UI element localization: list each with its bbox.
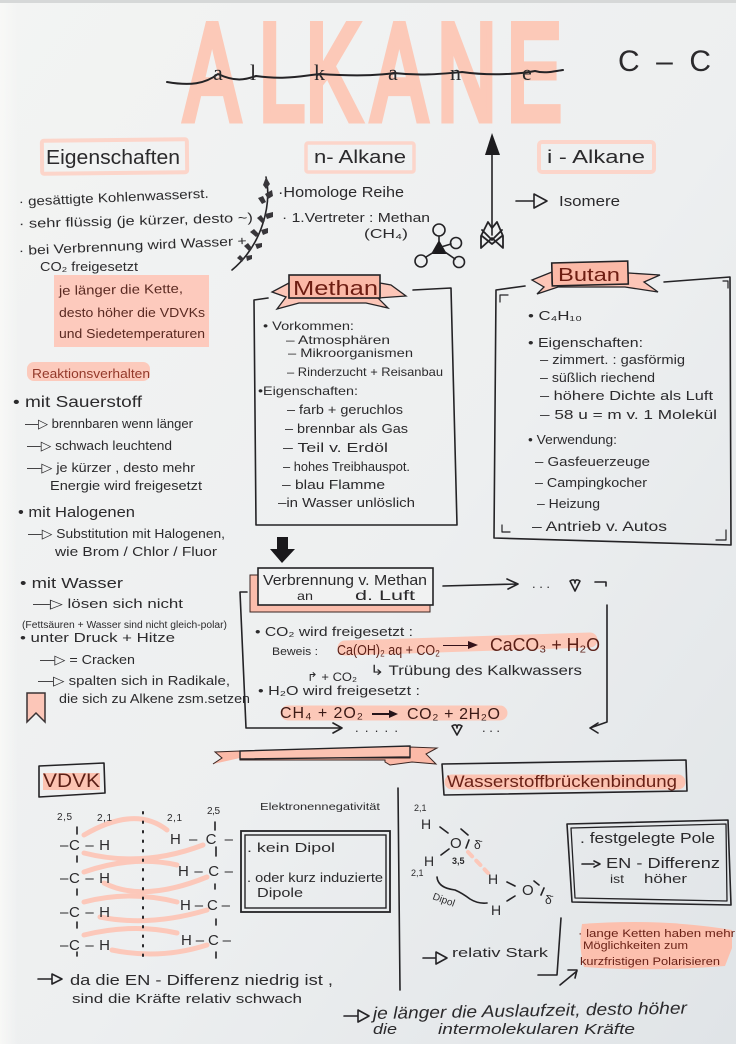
text block: Methan facts: • Vorkommen: (263, 319, 354, 333)
text block: Reaktionsverhalten list (13, 394, 250, 706)
diagram: hydrocarbon chains: –C – H (60, 904, 110, 921)
text block: Eigenschaften list (18, 186, 253, 274)
text block: n-Alkane notes: (CH₄) (364, 226, 408, 241)
text block: Eigenschaften list: · bei Verbrennung wird Wasser + (18, 233, 247, 258)
text: conclusion: die (373, 1021, 397, 1038)
callout: lange Ketten (578, 922, 735, 969)
text block: Reaktionsverhalten list: —▷ = Cracken (40, 652, 135, 667)
text block: Eigenschaften list: · gesättigte Kohlenwasserst. (18, 186, 209, 209)
text: H2O freigesetzt: • H₂O wird freigesetzt : (258, 683, 420, 698)
text block: Methan facts: – farb + geruchlos (287, 403, 403, 417)
frame bracket: left: ..... (355, 720, 398, 735)
icon: bookmark (27, 693, 45, 722)
panel: Methan (254, 275, 457, 525)
text: relativ stark (423, 945, 549, 964)
text block: Butan facts: • Eigenschaften: (528, 335, 643, 350)
text block: Butan facts: • Verwendung: (528, 432, 617, 447)
heading: Verbrennung v. Methan: d. Luft (355, 587, 415, 603)
text block: Reaktionsverhalten list: • unter Druck + Hitze (20, 630, 175, 645)
heading: Wasserstoffbrückenbindung: Wasserstoffbrückenbindung (447, 772, 677, 791)
icon: upward arrow (481, 133, 503, 248)
icon: black down arrow (270, 537, 295, 563)
text block: Butan facts (528, 308, 717, 534)
banner: Butan: Butan (558, 265, 620, 285)
heading: Eigenschaften: Eigenschaften (46, 147, 180, 169)
text block: Methan facts: •Eigenschaften: (258, 384, 358, 398)
text block: Methan facts: –in Wasser unlöslich (278, 495, 415, 510)
text block: Butan facts: – Gasfeuerzeuge (535, 454, 650, 469)
chart: pink interaction curves (84, 819, 207, 954)
text: Beweis: Beweis : (272, 646, 318, 658)
diagram: water molecules: H (421, 816, 431, 832)
text: conclusion (344, 998, 689, 1038)
text block: Reaktionsverhalten list: —▷ spalten sich in Radikale, (38, 673, 230, 688)
heading: VDVK (39, 763, 105, 797)
diagram: hydrocarbon chains (60, 812, 234, 960)
text block: Reaktionsverhalten list: —▷ schwach leuchtend (27, 438, 172, 453)
text block: Butan facts: – Heizung (537, 496, 600, 511)
callout: je länger die Kette (54, 275, 209, 347)
callout: je länger die Kette: und Siedetemperaturen (59, 326, 205, 341)
arrow: pointing to callout (560, 970, 577, 985)
diagram: hydrocarbon chains: H – C – (181, 932, 232, 949)
panel: VDVK (38, 763, 390, 1006)
equation: methane combustion: CH₄ + 2O₂ (280, 705, 363, 722)
panel: Wasserstoffbrückenbindung (411, 760, 735, 985)
diagram: water molecules (411, 803, 554, 918)
banner: Butan (532, 261, 660, 294)
banner: divider (213, 746, 437, 765)
diagram: electronegativity labels: 2,5 (207, 806, 220, 817)
text block: Reaktionsverhalten list: —▷ Substitution mit Halogenen, (28, 526, 225, 541)
text block: Methan facts (258, 319, 443, 510)
frame bracket: left: ... (482, 720, 500, 735)
text block: Eigenschaften list: · sehr flüssig (je kürzer, desto ~) (19, 210, 253, 231)
equation: calcium hydroxide: CaCO₃ + H₂O (490, 635, 600, 655)
box: festgelegte Pole: höher (644, 871, 688, 886)
heading: n-Alkane: n- Alkane (314, 147, 406, 167)
text block: Eigenschaften list: CO₂ freigesetzt (40, 259, 138, 274)
text block: Butan facts: – zimmert. : gasförmig (540, 352, 685, 367)
text block: Butan facts: • C₄H₁₀ (528, 308, 582, 323)
text block: Reaktionsverhalten list: die sich zu Alkene zsm.setzen (59, 691, 250, 706)
banner: Methan: Methan (293, 278, 378, 300)
text block: Reaktionsverhalten list: • mit Wasser (20, 575, 123, 592)
text: + CO2: ↱ + CO₂ (307, 670, 357, 684)
text block: Isomere: Isomere (559, 193, 620, 210)
equation: calcium hydroxide (337, 635, 600, 659)
arrow: top right: ... (532, 576, 550, 591)
heading: Wasserstoffbrückenbindung (442, 760, 687, 795)
equation: methane combustion (280, 705, 500, 723)
diagram: water molecules: Dipol (431, 891, 456, 910)
text block: Isomere (516, 193, 620, 210)
text block: Methan facts: – Rinderzucht + Reisanbau (287, 365, 443, 379)
box: kein Dipol: . oder kurz induzierte (247, 870, 383, 885)
callout: lange Ketten: Möglichkeiten zum (583, 940, 688, 952)
text block: Reaktionsverhalten list: wie Brom / Chlor / Fluor (54, 544, 218, 559)
text block: Reaktionsverhalten list: (Fettsäuren + Wasser sind nicht gleich-polar) (22, 620, 227, 631)
diagram: electronegativity labels: 2,1 (167, 813, 182, 824)
text block: Methan facts: – Atmosphären (286, 333, 390, 347)
text block: n-Alkane notes: · 1.Vertreter : Methan (282, 210, 430, 225)
equation: calcium hydroxide: Ca(OH)₂ aq + CO₂ (337, 642, 440, 659)
text block: Butan facts: – Campingkocher (535, 475, 648, 490)
text block: Butan facts: – Antrieb v. Autos (532, 518, 667, 534)
callout: lange Ketten: · lange Ketten haben mehr (578, 928, 735, 940)
diagram: water molecules: δ̄ (545, 893, 554, 907)
text: conclusion: je länger die Auslaufzeit, desto höher (370, 998, 689, 1023)
formula: C-C: C – C (618, 45, 711, 78)
box: festgelegte Pole (567, 820, 731, 905)
box: kein Dipol: . kein Dipol (247, 840, 335, 855)
icon: leaf branch (232, 177, 273, 270)
text block: Reaktionsverhalten list: • mit Sauerstoff (13, 394, 143, 411)
text block: Methan facts: – Mikroorganismen (288, 346, 413, 360)
diagram: hydrocarbon chains: –C – H (60, 937, 110, 954)
icon: methane molecule (415, 224, 464, 268)
arrow: top right (443, 576, 580, 591)
callout: je länger die Kette: desto höher die VDVKs (59, 305, 206, 320)
diagram: water molecules: 3,5 (452, 856, 465, 866)
frame bracket: right (590, 582, 607, 733)
text: EN-Differenz conclusion: da die EN - Differenz niedrig ist , (70, 973, 333, 989)
text block: Butan facts: – höhere Dichte als Luft (540, 388, 713, 403)
diagram: water molecules: H (424, 853, 434, 869)
text: EN-Differenz conclusion (38, 973, 333, 1006)
text block: Methan facts: – hohes Treibhauspot. (283, 460, 410, 474)
diagram: water molecules: δ̄ (474, 838, 483, 852)
heading: Eigenschaften (42, 139, 187, 174)
text: CO2 freigesetzt: • CO₂ wird freigesetzt : (255, 624, 413, 639)
text block: Butan facts: – süßlich riechend (540, 370, 655, 385)
text block: Reaktionsverhalten list: Energie wird freigesetzt (50, 478, 202, 493)
text block: Reaktionsverhalten list: • mit Halogenen (18, 505, 135, 521)
text block: Butan facts: – 58 u = m v. 1 Molekül (540, 407, 717, 422)
diagram: hydrocarbon chains: H – C – (178, 863, 234, 880)
diagram: electronegativity labels: 2,1 (97, 813, 112, 824)
box: kein Dipol (241, 831, 390, 912)
diagram: water molecules: 2,1 (414, 803, 427, 813)
diagram: hydrocarbon chains: –C – H (60, 837, 110, 854)
text block: n-Alkane notes: ·Homologe Reihe (278, 185, 404, 201)
diagram: hydrocarbon chains: H – C – (180, 897, 231, 914)
diagram: hydrocarbon chains: H – C – (170, 831, 234, 848)
frame bracket: left (240, 592, 500, 735)
banner: Methan (272, 275, 406, 309)
callout: lange Ketten: kurzfristigen Polarisieren (580, 956, 720, 968)
diagram: water molecules: H (488, 871, 498, 887)
text block: n-Alkane notes (278, 185, 430, 241)
diagram: water molecules: 2,1 (411, 868, 424, 878)
text block: Methan facts: – Teil v. Erdöl (283, 441, 388, 455)
diagram: water molecules: O (450, 835, 462, 852)
heading: Verbrennung v. Methan: Verbrennung v. Methan (263, 572, 427, 589)
box: festgelegte Pole: . festgelegte Pole (580, 831, 715, 847)
text: Trübung des Kalkwassers: ↳ Trübung des Kalkwassers (370, 662, 582, 678)
heading: n-Alkane (306, 143, 414, 172)
diagram: electronegativity labels: 2,5 (57, 812, 72, 823)
diagram: water molecules: O (522, 882, 534, 899)
script word: alkane: alkane (213, 60, 532, 85)
text block: Methan facts: – blau Flamme (282, 478, 385, 492)
text block: Methan facts: – brennbar als Gas (285, 422, 408, 436)
heading: Reaktionsverhalten: Reaktionsverhalten (32, 366, 150, 381)
heading: VDVK: VDVK (43, 771, 100, 792)
box: kein Dipol: Dipole (257, 885, 303, 900)
equation: methane combustion: CO₂ + 2H₂O (407, 706, 500, 723)
text block: Reaktionsverhalten list: —▷ je kürzer , desto mehr (27, 460, 196, 475)
callout: je länger die Kette: je länger die Kette, (58, 281, 183, 298)
text block: Reaktionsverhalten list: —▷ lösen sich nicht (33, 596, 183, 611)
box: festgelegte Pole: ist (610, 872, 625, 886)
text: Elektronennegativität: Elektronennegativität (260, 801, 380, 813)
diagram: water molecules: H (491, 902, 501, 918)
text: EN-Differenz conclusion: sind die Kräfte relativ schwach (72, 991, 302, 1006)
diagram: hydrocarbon chains: –C – H (60, 870, 110, 887)
panel: Verbrennung von Methan (240, 568, 607, 735)
bracket (538, 918, 561, 975)
heading: Verbrennung v. Methan: an (297, 589, 313, 603)
text: relativ stark: relativ Stark (452, 945, 549, 960)
heading: Verbrennung v. Methan (250, 568, 433, 612)
heading: i-Alkane (539, 142, 654, 172)
diagram: electronegativity labels (57, 806, 220, 824)
text: conclusion: intermolekularen Kräfte (438, 1021, 635, 1038)
divider: vertical line (398, 788, 400, 990)
text block: Reaktionsverhalten list: —▷ brennbaren wenn länger (25, 416, 194, 431)
box: festgelegte Pole: EN - Differenz (606, 856, 720, 872)
heading: i-Alkane: i - Alkane (547, 147, 645, 167)
panel: Butan (494, 261, 731, 545)
